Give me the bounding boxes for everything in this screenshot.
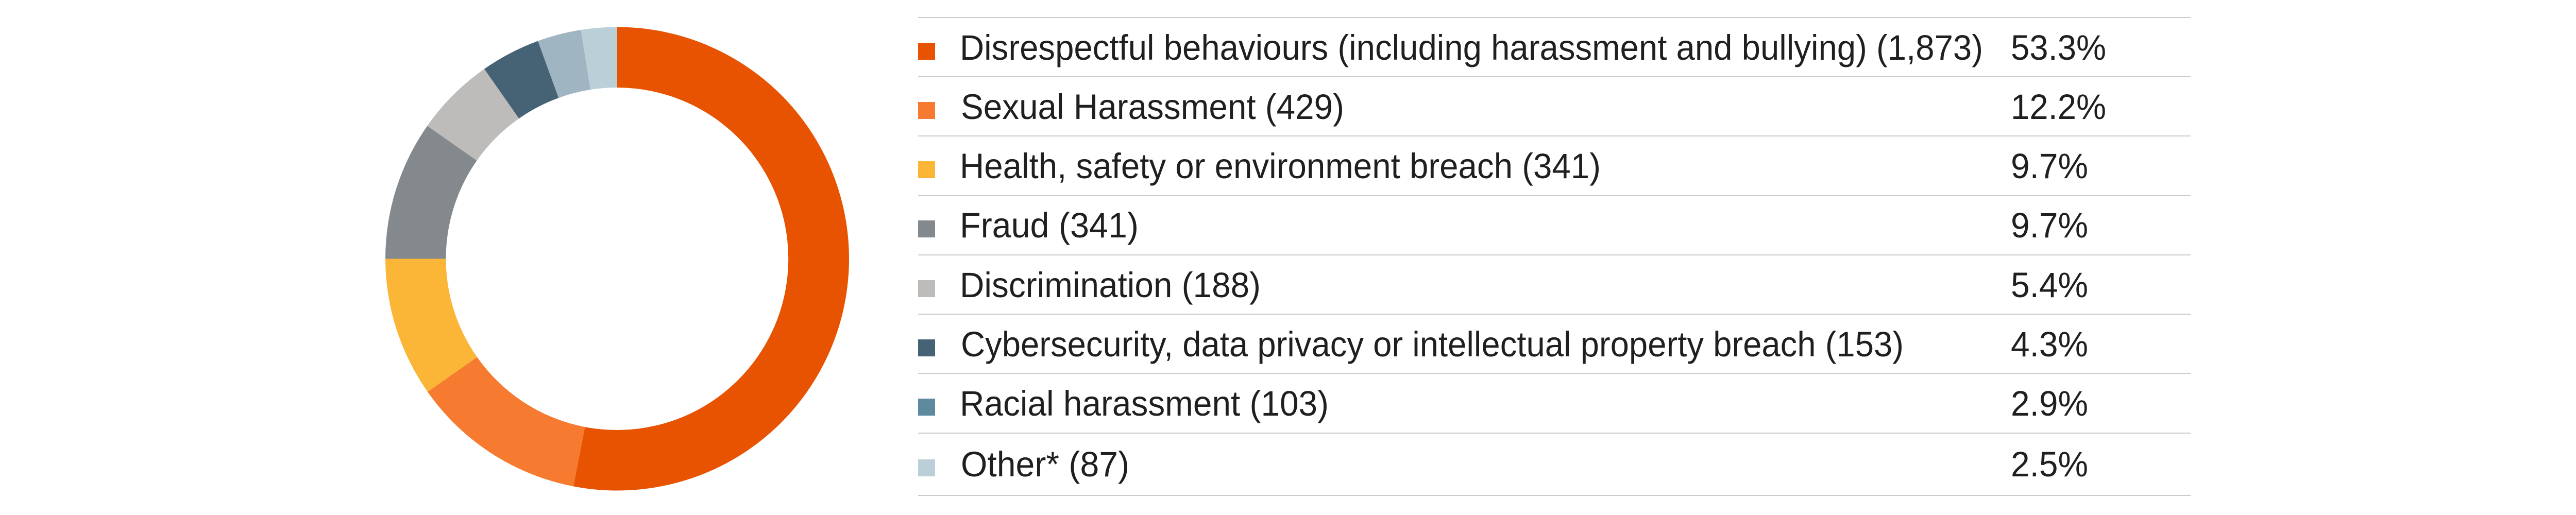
row: disrespectful behaviours: 53.3% [2011, 28, 2106, 67]
segment: other [581, 27, 617, 90]
row: discrimination [918, 265, 2088, 305]
row: health, safety or environment breach: 9.7% [2011, 146, 2088, 186]
row: discrimination: Discrimination (188) [960, 265, 1261, 305]
row: cybersecurity: 4.3% [2011, 324, 2088, 364]
row: health, safety or environment breach [918, 146, 2088, 186]
row: racial harassment: Racial harassment (103) [960, 384, 1329, 423]
segment: fraud [385, 126, 477, 259]
row: racial harassment: 2.9% [2011, 384, 2088, 423]
row: discrimination: 5.4% [2011, 265, 2088, 305]
segment: racial harassment [538, 30, 590, 98]
segment: cybersecurity [484, 41, 558, 118]
row: fraud: Fraud (341) [960, 205, 1139, 245]
donut chart [385, 27, 849, 490]
row: cybersecurity: Cybersecurity, data privacy or intellectual property breach (153) [961, 324, 1904, 364]
row: racial harassment [918, 384, 2088, 423]
row: other: 2.5% [2011, 444, 2088, 484]
row: health, safety or environment breach: Health, safety or environment breach (341) [960, 146, 1601, 186]
segment: disrespectful behaviours [573, 27, 849, 490]
row: sexual harassment: Sexual Harassment (429) [961, 87, 1344, 127]
row: fraud: 9.7% [2011, 205, 2088, 245]
row: sexual harassment [918, 87, 2106, 127]
row: other [918, 444, 2088, 484]
segment: discrimination [427, 69, 519, 161]
row: other: Other* (87) [961, 444, 1129, 484]
legend table [918, 17, 2191, 496]
row: sexual harassment: 12.2% [2011, 87, 2106, 127]
row: disrespectful behaviours: Disrespectful behaviours (including harassment and bullying) (1,873) [960, 28, 1983, 67]
segment: health, safety or environment breach [385, 259, 477, 392]
row: fraud [918, 205, 2088, 245]
segment: sexual harassment [428, 357, 585, 486]
